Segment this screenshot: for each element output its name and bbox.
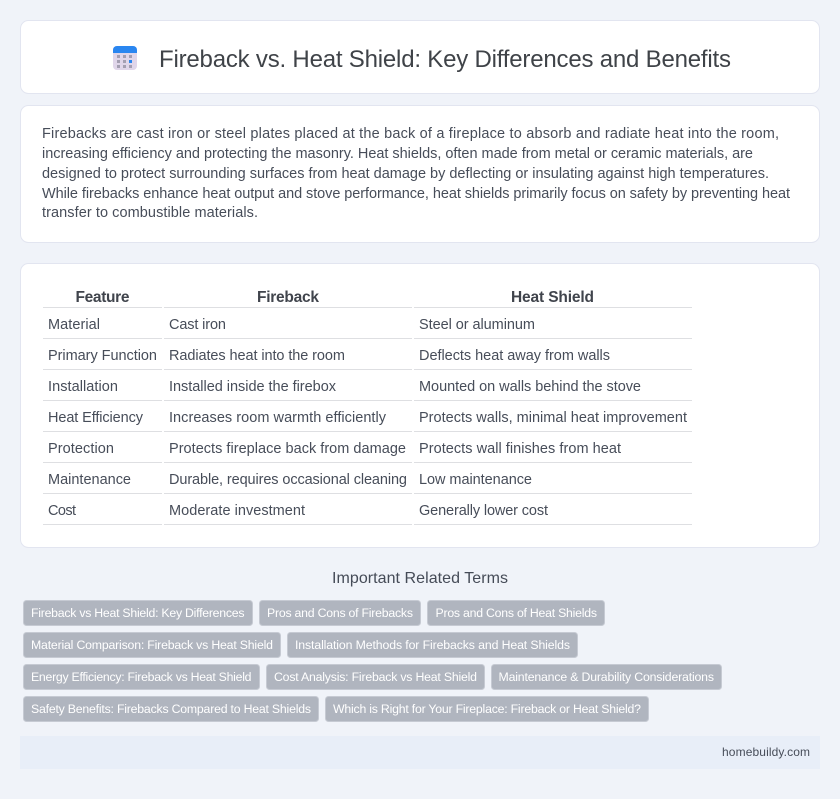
row: protection: Protects fireplace back from damage: [169, 441, 406, 457]
row: maintenance: Durable, requires occasional cleaning: [169, 472, 407, 488]
title: Fireback vs. Heat Shield: Key Differences and Benefits: [159, 46, 731, 73]
tag: [428, 600, 604, 626]
tag: [24, 632, 280, 658]
row: primary function: Deflects heat away from walls: [419, 348, 610, 364]
row: primary function: [48, 348, 610, 364]
row: heat efficiency: Protects walls, minimal heat improvement: [419, 410, 687, 426]
row: installation: Installation: [48, 379, 118, 395]
row: primary function: Radiates heat into the room: [169, 348, 345, 364]
table header: [76, 289, 594, 306]
tag: Material Comparison: Fireback vs Heat Shield: [31, 638, 273, 652]
tag: [326, 696, 648, 722]
row: heat efficiency: Increases room warmth efficiently: [169, 410, 387, 426]
row: material: Steel or aluminum: [419, 317, 535, 333]
row: heat efficiency: Heat Efficiency: [48, 410, 144, 426]
tag: Maintenance & Durability Considerations: [498, 670, 714, 684]
tag: Safety Benefits: Firebacks Compared to Heat Shields: [31, 702, 311, 716]
row: heat efficiency: [48, 410, 687, 426]
heading: related terms: Important Related Terms: [332, 570, 508, 587]
row: material: Cast iron: [169, 317, 226, 333]
text block: introduction: increasing efficiency and protecting the masonry. Heat shields, often made from metal or ceramic materials, are: [42, 146, 753, 162]
row: maintenance: Low maintenance: [419, 472, 532, 488]
tag: [492, 664, 722, 690]
row: protection: Protects wall finishes from heat: [419, 441, 621, 457]
panel: introduction: [20, 106, 820, 242]
text block: introduction: While firebacks enhance heat output and stove performance, heat shields primarily focus on safety by preventing heat: [42, 186, 790, 202]
text block: introduction: transfer to combustible materials.: [42, 205, 258, 221]
footer: [20, 736, 820, 769]
row: protection: Protection: [48, 441, 114, 457]
row: maintenance: [48, 472, 532, 488]
icon: calendar: [113, 46, 137, 70]
panel: header: [20, 20, 820, 94]
tag: [288, 632, 578, 658]
row: material: Material: [48, 317, 100, 333]
table header: Feature: [76, 289, 130, 306]
row: maintenance: Maintenance: [48, 472, 131, 488]
panel: comparison table: [20, 264, 820, 548]
tag: Which is Right for Your Fireplace: Fireback or Heat Shield?: [333, 702, 641, 716]
tag: [260, 600, 420, 626]
text block: introduction: designed to protect surrounding surfaces from heat damage by deflecting or insulating against high temperatures.: [42, 166, 769, 182]
tag: [24, 664, 260, 690]
text block: introduction: Firebacks are cast iron or steel plates placed at the back of a fireplace to absorb and radiate heat into the room,: [42, 126, 779, 142]
related terms tags: [24, 600, 722, 722]
text block: introduction: [42, 126, 790, 221]
tag: Cost Analysis: Fireback vs Heat Shield: [274, 670, 477, 684]
tag: Pros and Cons of Heat Shields: [436, 606, 597, 620]
tag: Fireback vs Heat Shield: Key Differences: [31, 606, 244, 620]
row: installation: Installed inside the firebox: [169, 379, 337, 395]
table row lines: [43, 307, 692, 525]
row: material: [48, 317, 535, 333]
row: primary function: Primary Function: [48, 348, 157, 364]
row: installation: [48, 379, 641, 395]
row: protection: [48, 441, 621, 457]
table header: Heat Shield: [511, 289, 594, 306]
row: cost: Cost: [48, 503, 76, 519]
tag: Installation Methods for Firebacks and Heat Shields: [295, 638, 570, 652]
tag: Energy Efficiency: Fireback vs Heat Shield: [31, 670, 252, 684]
row: cost: Moderate investment: [169, 503, 305, 519]
tag: [24, 696, 318, 722]
footer source text: homebuildy.com: [722, 745, 810, 759]
tag: [266, 664, 484, 690]
tag: [24, 600, 252, 626]
table header: Fireback: [257, 289, 319, 306]
row: cost: [48, 503, 548, 519]
row: installation: Mounted on walls behind the stove: [419, 379, 641, 395]
row: cost: Generally lower cost: [419, 503, 548, 519]
tag: Pros and Cons of Firebacks: [267, 606, 413, 620]
